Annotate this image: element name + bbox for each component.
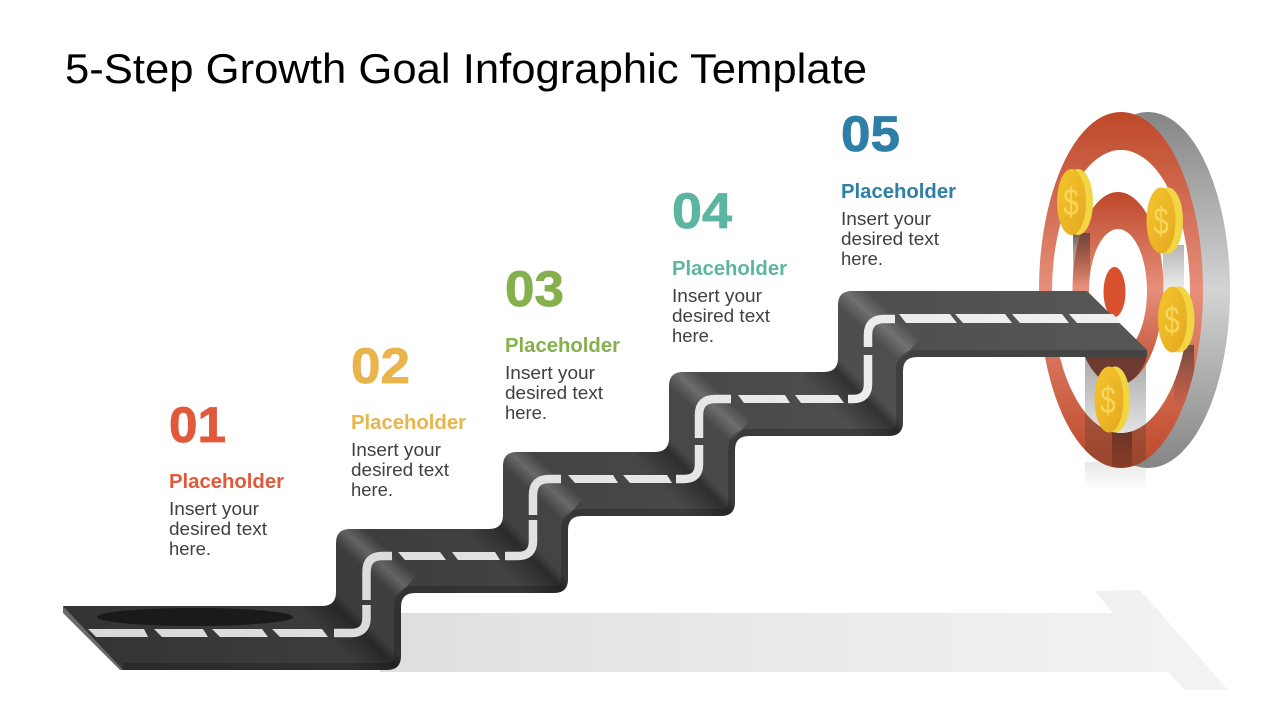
step 03 text bbox=[505, 261, 620, 423]
coin shadow on inner ring bbox=[1073, 233, 1090, 285]
road centre line bends bbox=[334, 319, 895, 633]
title: 5-Step Growth Goal Infographic Template bbox=[65, 45, 867, 92]
coin 2: $ bbox=[1153, 201, 1169, 243]
road left edge bbox=[63, 606, 130, 670]
step 04 text: Placeholder bbox=[672, 258, 787, 280]
step 03 text: here. bbox=[505, 403, 547, 423]
inner white ring bbox=[1089, 229, 1147, 353]
step 02 text: Placeholder bbox=[351, 412, 466, 434]
coin 4 bbox=[1094, 366, 1130, 432]
target reflection bbox=[1085, 462, 1146, 488]
coin 3 bbox=[1158, 286, 1194, 352]
step 04 text: 04 bbox=[672, 183, 732, 239]
step 04 text: Insert your bbox=[672, 286, 762, 306]
step 01 text: desired text bbox=[169, 519, 267, 539]
coin 1: $ bbox=[1063, 182, 1079, 224]
target side wall bbox=[1066, 112, 1230, 468]
step 03 text: desired text bbox=[505, 383, 603, 403]
step 01 text: Placeholder bbox=[169, 471, 284, 493]
inner red ring bbox=[1072, 192, 1164, 385]
arrow shadow bbox=[380, 590, 1228, 690]
road surface bbox=[63, 291, 1147, 670]
road centre line bbox=[88, 314, 1121, 637]
step 05 text: desired text bbox=[841, 229, 939, 249]
outer red ring bbox=[1039, 112, 1203, 468]
step 02 text: here. bbox=[351, 480, 393, 500]
step 03 text: Insert your bbox=[505, 363, 595, 383]
road bbox=[63, 276, 1147, 690]
road shadow on inner ring bbox=[1085, 357, 1146, 385]
step 01 text bbox=[169, 397, 284, 559]
shadows on outer ring bbox=[1085, 345, 1194, 468]
step 05 text bbox=[841, 106, 956, 269]
step 05 text: here. bbox=[841, 249, 883, 269]
step 01 text: here. bbox=[169, 539, 211, 559]
step 03 text: 03 bbox=[505, 261, 564, 317]
step 04 text: here. bbox=[672, 326, 714, 346]
road fold shading bbox=[123, 276, 1147, 690]
step 03 text: Placeholder bbox=[505, 335, 620, 357]
icon: target bbox=[1039, 112, 1230, 488]
step 01 text: 01 bbox=[169, 397, 226, 453]
step 04 text: desired text bbox=[672, 306, 770, 326]
bullseye bbox=[1104, 267, 1126, 317]
step 02 text: desired text bbox=[351, 460, 449, 480]
road hole bbox=[97, 608, 293, 626]
coin 2 bbox=[1146, 188, 1183, 254]
step 02 text bbox=[351, 338, 466, 500]
coin 4: $ bbox=[1100, 380, 1116, 422]
step 02 text: 02 bbox=[351, 338, 410, 394]
step 05 text: 05 bbox=[841, 106, 900, 162]
road front edge bbox=[123, 357, 1147, 670]
step 05 text: Insert your bbox=[841, 209, 931, 229]
step 01 text: Insert your bbox=[169, 499, 259, 519]
step 05 text: Placeholder bbox=[841, 181, 956, 203]
step 04 text bbox=[672, 183, 787, 346]
coin 1 bbox=[1057, 169, 1093, 235]
coin 3: $ bbox=[1164, 300, 1180, 342]
outer white ring bbox=[1052, 150, 1190, 433]
step 02 text: Insert your bbox=[351, 440, 441, 460]
shadows on white ring bbox=[1085, 245, 1184, 435]
